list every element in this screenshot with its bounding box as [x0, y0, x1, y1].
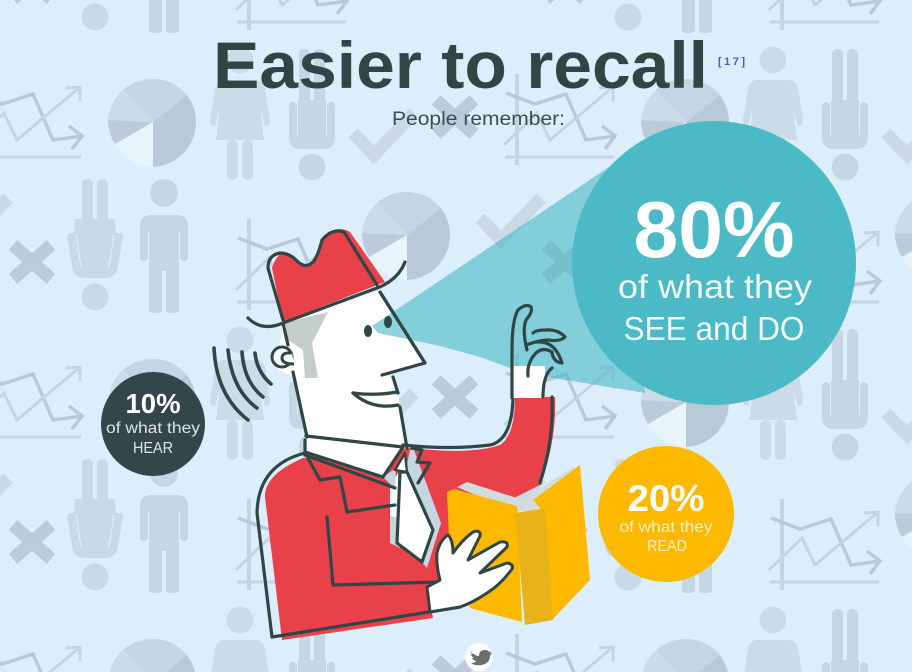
- ear: [272, 347, 294, 367]
- raised hand: [512, 306, 565, 398]
- book left cover: [447, 489, 522, 622]
- 20% line two: READ: [647, 538, 687, 555]
- 10% line two: HEAR: [133, 440, 173, 457]
- 10% line one: of what they: [106, 420, 200, 437]
- title: Easier to recall: [213, 28, 708, 102]
- collar: [306, 436, 403, 447]
- callout: 10% hear: [101, 372, 205, 476]
- collar white: [305, 437, 403, 477]
- 80% line one: of what they: [618, 268, 813, 305]
- nose line over cone: [380, 292, 425, 363]
- open book: [447, 465, 590, 625]
- collar shadow: [383, 468, 396, 489]
- eye far: [384, 316, 392, 328]
- jacket red fill: [265, 397, 555, 640]
- book holding hand: [427, 531, 512, 612]
- book spine: [515, 508, 553, 625]
- callout: 20% read: [598, 446, 734, 582]
- book pages: [457, 467, 582, 512]
- subtitle: People remember:: [392, 109, 565, 130]
- right lapel: [412, 448, 430, 483]
- pocket: [327, 517, 440, 585]
- hat brim: [248, 262, 405, 327]
- 80% line two: SEE and DO: [624, 310, 804, 347]
- arm top line: [403, 398, 513, 448]
- outlines: [248, 231, 552, 637]
- vision cone: [372, 165, 645, 393]
- hair: [285, 312, 328, 378]
- shirt shadow: [390, 450, 441, 568]
- 10% figure: 10%: [126, 388, 181, 419]
- eye near: [364, 325, 372, 337]
- lapel line: [308, 458, 395, 512]
- jacket outline: [257, 453, 460, 637]
- head white fill: [278, 290, 425, 448]
- shirt strip white: [390, 470, 400, 520]
- 20% figure: 20%: [628, 478, 704, 519]
- citation reference: [17]: [718, 56, 745, 68]
- raised hand palm: [512, 366, 545, 398]
- callout: 80% see and do: [572, 121, 856, 405]
- hat: [272, 229, 385, 322]
- tie: [397, 472, 433, 562]
- tie knot: [395, 453, 407, 472]
- hat outline: [268, 231, 377, 320]
- 80% figure: 80%: [634, 185, 794, 274]
- raised hand outline: [512, 306, 565, 398]
- sound waves: [214, 348, 271, 420]
- book right cover: [533, 465, 590, 620]
- icon: twitter bird: [465, 643, 493, 671]
- illustration: man: [214, 229, 590, 640]
- face profile: [380, 292, 425, 375]
- back of head: [283, 323, 288, 345]
- 20% line one: of what they: [620, 519, 712, 536]
